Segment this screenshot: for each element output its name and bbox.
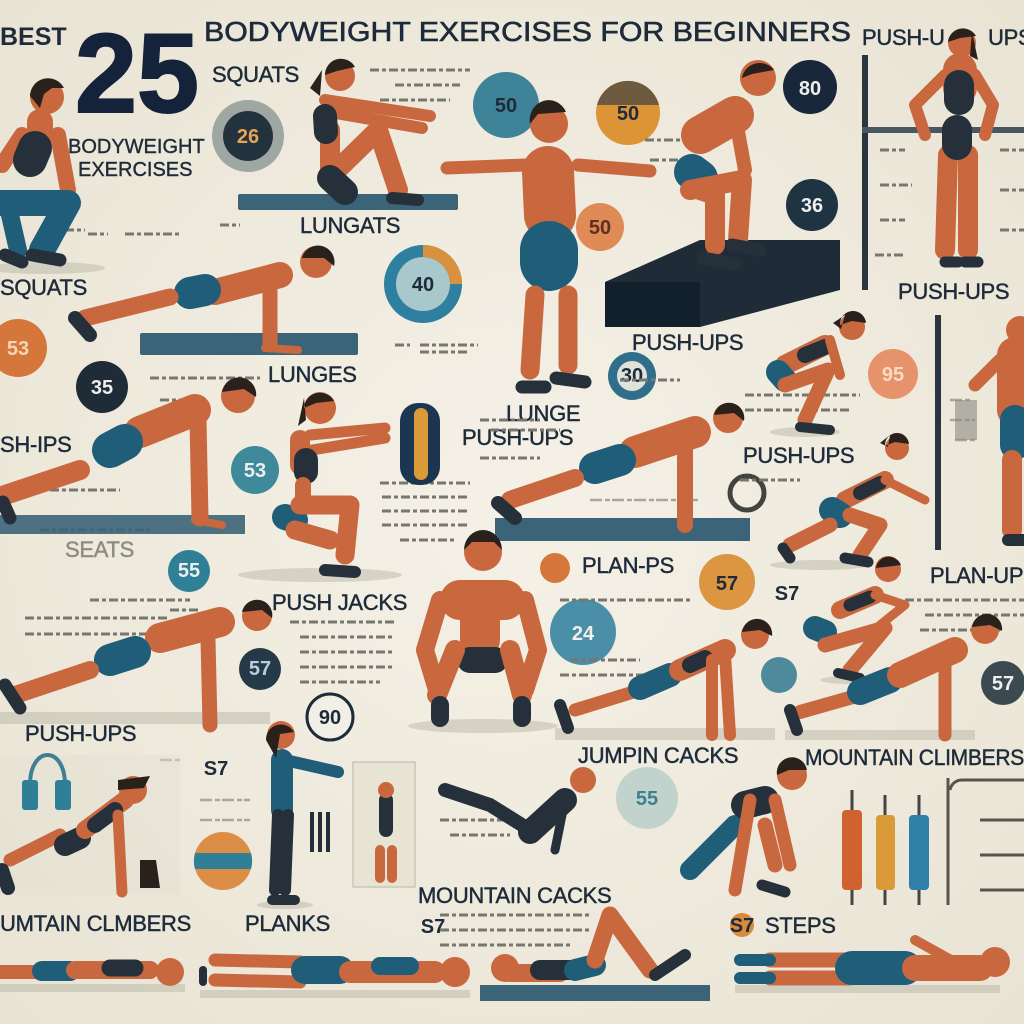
number badges: 57 bbox=[716, 573, 738, 595]
colour disc and bars bbox=[194, 812, 328, 890]
number badges: 53 bbox=[244, 460, 266, 482]
title: BODYWEIGHT bbox=[68, 136, 205, 158]
number badges: 50 bbox=[495, 95, 517, 117]
number badges: 50 bbox=[617, 103, 639, 125]
number badges: 40 bbox=[412, 274, 434, 296]
title: EXERCISES bbox=[78, 159, 192, 181]
exercise labels: LUNGE bbox=[506, 401, 580, 426]
squat woman with weight bbox=[238, 392, 440, 582]
number badges: 80 bbox=[799, 78, 821, 100]
exercise labels: LUNGES bbox=[268, 362, 357, 387]
lunging woman right row 3 bbox=[770, 433, 925, 570]
number badges: 90 bbox=[319, 707, 341, 729]
title: 25 bbox=[75, 11, 199, 136]
number badges: 57 bbox=[249, 658, 271, 680]
title: BEST bbox=[0, 23, 67, 51]
plank man upper left bbox=[75, 246, 358, 355]
number badges: S7 bbox=[775, 583, 799, 605]
plank man lower right bbox=[785, 614, 1002, 740]
exercise labels: PLAN-UP bbox=[930, 563, 1023, 588]
number badges: 55 bbox=[636, 788, 658, 810]
number badges: 57 bbox=[992, 673, 1014, 695]
number badges: S7 bbox=[204, 758, 228, 780]
resistance band panel bbox=[0, 755, 180, 895]
squat man on box bbox=[605, 60, 840, 327]
plank man lower left bbox=[0, 600, 272, 725]
standing woman with arms out lower bbox=[257, 721, 338, 909]
title bbox=[0, 11, 851, 181]
mini figure panel bbox=[353, 762, 415, 887]
exercise labels: PLANKS bbox=[245, 911, 330, 936]
number badges: 50 bbox=[589, 217, 611, 239]
exercise labels: PLAN-PS bbox=[582, 553, 674, 578]
hanging bags bbox=[842, 778, 1024, 905]
exercise labels: UMTAIN CLMBERS bbox=[0, 911, 191, 936]
number badges: 24 bbox=[572, 623, 595, 645]
exercise labels: PUSH-UPS bbox=[743, 443, 854, 468]
exercise labels: PUSH-UPS bbox=[462, 425, 573, 450]
exercise labels: STEPS bbox=[765, 913, 836, 938]
exercise labels: PUSH-UPS bbox=[25, 721, 136, 746]
exercise labels: SEATS bbox=[65, 537, 134, 562]
exercise labels: PUSH-U bbox=[862, 25, 945, 50]
crouching man with leg back bbox=[690, 757, 807, 892]
standing man with arms out bbox=[447, 100, 650, 387]
lying figure 3 bbox=[735, 940, 1010, 993]
number badges: S7 bbox=[730, 915, 754, 937]
lying figure 2 bbox=[200, 957, 470, 998]
exercise labels: PUSH JACKS bbox=[272, 590, 407, 615]
plank man center bbox=[495, 403, 750, 541]
number badges: 26 bbox=[237, 126, 259, 148]
exercise labels: MOUNTAIN CACKS bbox=[418, 883, 611, 908]
sitting squat woman bbox=[238, 59, 458, 210]
exercise labels: SQUATS bbox=[212, 62, 299, 87]
lying figure 1 bbox=[0, 958, 185, 992]
squat woman top left bbox=[0, 78, 105, 274]
crouching woman right row 4 bbox=[815, 556, 905, 684]
glute bridge figure bbox=[480, 915, 710, 1001]
v-sit figure bbox=[445, 767, 596, 850]
exercise labels: SQUATS bbox=[0, 275, 87, 300]
number badges: 30 bbox=[621, 365, 643, 387]
number badges: 36 bbox=[801, 195, 823, 217]
exercise labels: LUNGATS bbox=[300, 213, 400, 238]
crouching woman right row 2 bbox=[770, 311, 866, 437]
plank man lower centre bbox=[555, 619, 775, 740]
exercise labels: JUMPIN CACKS bbox=[578, 743, 738, 768]
exercise labels: SH-IPS bbox=[0, 432, 72, 457]
title: BODYWEIGHT EXERCISES FOR BEGINNERS bbox=[204, 16, 851, 47]
plank man left middle bbox=[0, 377, 256, 534]
standing woman top right with bar bbox=[862, 28, 1024, 290]
exercise labels: PUSH-UPS bbox=[632, 330, 743, 355]
number badges: 53 bbox=[7, 338, 29, 360]
exercise labels: PUSH-UPS bbox=[898, 279, 1009, 304]
number badges: 55 bbox=[178, 560, 200, 582]
number badges: 95 bbox=[882, 364, 904, 386]
push-up woman lower left bbox=[2, 776, 160, 892]
tall figure right edge bbox=[935, 315, 1024, 550]
number badges: 35 bbox=[91, 377, 113, 399]
deep squat man front bbox=[408, 530, 558, 733]
number badges: S7 bbox=[421, 916, 445, 938]
